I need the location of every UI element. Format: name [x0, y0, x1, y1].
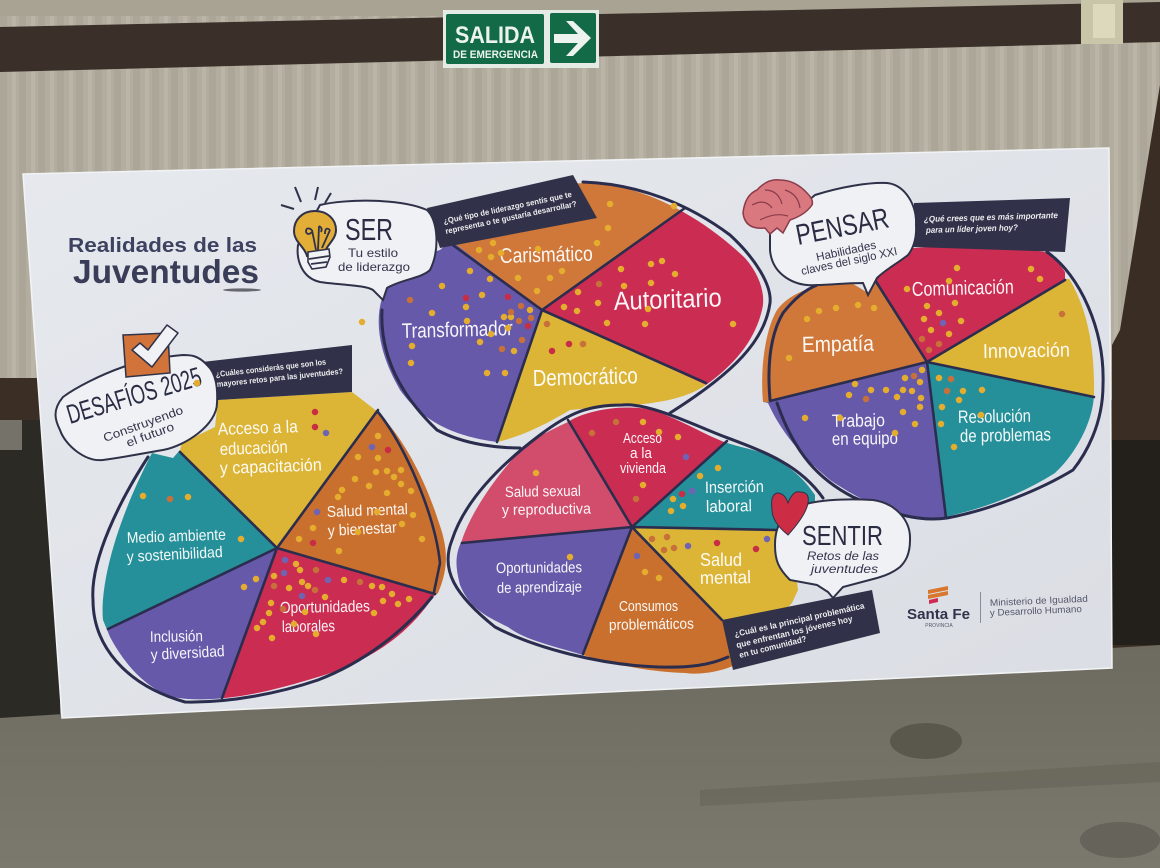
- logo: Santa Fe: PROVINCIA: [925, 623, 953, 629]
- label: Acceso a la vivienda: a la: [630, 446, 653, 462]
- slice: Democrático: [497, 310, 706, 450]
- label: Salud sexual y reproductiva: Salud sexual: [505, 483, 581, 501]
- label: Empatía: Empatía: [802, 331, 875, 357]
- heading: DESAFÍOS 2025: DESAFÍOS 2025: [63, 362, 205, 430]
- heading: PENSAR: PENSAR: [793, 203, 892, 252]
- label: Salud mental y bienestar: y bienestar: [327, 519, 397, 540]
- title: Realidades de las: [68, 234, 257, 257]
- sticker dots: DESAFÍOS: [143, 436, 422, 638]
- slice: Carismático: [456, 183, 680, 308]
- panel: SENTIR pie: [440, 395, 830, 680]
- slice: Comunicación: [876, 247, 1065, 360]
- label: Oportunidades laborales: [280, 598, 370, 636]
- SER question box: representa o te gustaría desarrollar?: [445, 199, 578, 236]
- slice: Trabajo en equipo: [764, 364, 944, 518]
- label: Salud sexual y reproductiva: y reproductiva: [502, 500, 592, 519]
- slice: Innovación: [930, 279, 1094, 396]
- label: Democrático: Democrático: [532, 362, 638, 391]
- label: Salud mental y bienestar: Salud mental: [327, 501, 408, 521]
- slice: Resolución de problemas: [928, 364, 1094, 516]
- label: Resolución de problemas: de problemas: [960, 424, 1051, 446]
- slice: Acceso a la educación: [180, 392, 376, 546]
- label: Oportunidades de aprendizaje: Oportunidades: [496, 559, 582, 577]
- label: Inserción laboral: laboral: [706, 497, 752, 516]
- panel: SER pie: [358, 180, 772, 450]
- SER question box: ¿Qué tipo de liderazgo sentís que te: [443, 190, 573, 226]
- label: Oportunidades de aprendizaje: de aprendizaje: [497, 579, 582, 597]
- wall outlet: [1081, 0, 1123, 44]
- label: Salud mental: mental: [700, 567, 751, 588]
- title: [68, 234, 261, 292]
- label: Oportunidades laborales: laborales: [282, 618, 335, 636]
- label: Autoritario: Autoritario: [613, 282, 722, 316]
- label: Consumos problemáticos: problemáticos: [609, 616, 694, 634]
- subheading: Construyendo el futuro: el futuro: [124, 419, 176, 450]
- slice: Oportunidades laborales: [223, 550, 437, 698]
- logo: Santa Fe: y Desarrollo Humano: [990, 604, 1082, 619]
- label: Acceso a la vivienda: [620, 431, 667, 477]
- label: Transformador: Transformador: [402, 317, 513, 343]
- sticker dot: [194, 380, 200, 386]
- icon: brain: [743, 180, 812, 234]
- icon: light bulb: [281, 187, 336, 269]
- label: Medio ambiente y sostenibilidad: y sostenibilidad: [126, 544, 223, 566]
- SENTIR question box: en tu comunidad?: [738, 634, 807, 660]
- slice: Autoritario: [544, 212, 764, 385]
- heading: SENTIR: SENTIR: [802, 520, 883, 551]
- subheading: Habilidades claves del siglo XXI: Habilidades: [815, 239, 878, 264]
- subheading: Tu estilo de liderazgo: Tu estilo: [348, 246, 398, 260]
- logo: Santa Fe: Santa Fe: [907, 606, 970, 623]
- SER speech bubble: [281, 187, 436, 300]
- slice: Medio ambiente: [102, 450, 275, 630]
- subheading: Tu estilo de liderazgo: de liderazgo: [338, 260, 410, 274]
- wooden beam: [0, 2, 1160, 72]
- label: Acceso a la educación y capacitación: Acceso a la: [217, 416, 298, 439]
- label: Salud mental: [700, 550, 751, 588]
- slice: Salud sexual y reproductiva: [460, 422, 630, 543]
- label: Oportunidades laborales: Oportunidades: [280, 598, 370, 617]
- emergency exit sign: DE EMERGENCIA: [453, 49, 538, 61]
- subheading: Retos de las juventudes: [807, 549, 879, 576]
- heading: SER: SER: [345, 212, 393, 247]
- SENTIR question box: ¿Cuál es la principal problemática: [733, 600, 866, 639]
- label: Resolución de problemas: [958, 406, 1051, 446]
- DESAFÍOS question box: [202, 345, 352, 400]
- label: Oportunidades de aprendizaje: [496, 559, 582, 597]
- label: Acceso a la educación y capacitación: educación: [219, 437, 288, 459]
- label: Inclusión y diversidad: y diversidad: [150, 643, 225, 664]
- label: Salud mental y bienestar: [327, 501, 408, 540]
- label: Consumos problemáticos: Consumos: [619, 598, 678, 615]
- label: Inclusión y diversidad: [150, 628, 225, 664]
- icon: heart: [772, 492, 808, 535]
- slice: Acceso a la vivienda: [570, 408, 724, 525]
- SENTIR question box: que enfrentan los jóvenes hoy: [735, 613, 854, 650]
- sticker dots: SER: [362, 204, 733, 373]
- SENTIR speech bubble: [772, 492, 910, 598]
- label: Salud mental: Salud: [700, 550, 742, 570]
- slice: Consumos problemáticos: [583, 530, 732, 674]
- PENSAR question box: [913, 198, 1070, 252]
- DESAFÍOS speech bubble: [56, 325, 217, 460]
- label: Inserción laboral: Inserción: [705, 478, 764, 497]
- label: Medio ambiente y sostenibilidad: Medio ambiente: [127, 527, 226, 547]
- label: Comunicación: Comunicación: [912, 276, 1014, 301]
- label: Medio ambiente y sostenibilidad: [126, 527, 226, 566]
- slice: Salud mental: [279, 413, 446, 594]
- label: Acceso a la educación y capacitación: y capacitación: [219, 454, 322, 478]
- label: Resolución de problemas: Resolución: [958, 406, 1031, 427]
- subheading: Construyendo el futuro: Construyendo: [101, 403, 185, 445]
- label: Trabajo en equipo: Trabajo: [832, 410, 885, 431]
- subheading: Habilidades claves del siglo XXI: claves del siglo XXI: [800, 246, 898, 278]
- label: Acceso a la vivienda: Acceso: [623, 431, 662, 447]
- DESAFÍOS question box: ¿Cuáles considerás que son los: [215, 357, 327, 379]
- label: Acceso a la educación y capacitación: [217, 416, 322, 478]
- slice: Salud mental: [635, 528, 798, 620]
- label: Inserción laboral: [705, 478, 764, 516]
- label: Salud sexual y reproductiva: [502, 483, 592, 519]
- concrete floor: [0, 645, 1160, 868]
- slice: Empatía: [762, 283, 925, 402]
- label: Innovación: Innovación: [983, 339, 1070, 363]
- panel: PENSAR pie: [762, 247, 1105, 520]
- label: Consumos problemáticos: [609, 598, 694, 634]
- slice: Oportunidades de aprendizaje: [456, 528, 630, 655]
- subheading: Retos de las juventudes: juventudes: [809, 562, 878, 576]
- PENSAR question box: ¿Qué crees que es más importante: [924, 210, 1058, 224]
- subheading: Tu estilo de liderazgo: [338, 246, 410, 274]
- emergency exit sign: SALIDA: [455, 22, 535, 49]
- SENTIR question box: [722, 590, 880, 670]
- label: Trabajo en equipo: [832, 410, 898, 449]
- logo: Santa Fe: Ministerio de Igualdad: [990, 594, 1088, 609]
- PENSAR question box: para un líder joven hoy?: [925, 222, 1019, 235]
- title: Juventudes: [73, 253, 259, 290]
- label: Carismático: Carismático: [500, 243, 593, 268]
- sticker dots: SENTIR: [536, 422, 718, 578]
- subheading: Retos de las juventudes: Retos de las: [807, 549, 879, 563]
- PENSAR speech bubble: [743, 180, 916, 295]
- slice: Inserción laboral: [635, 443, 815, 529]
- icon: checkbox: [123, 325, 178, 377]
- label: Inclusión y diversidad: Inclusión: [150, 628, 203, 646]
- SER question box: [427, 175, 597, 248]
- label: Acceso a la vivienda: vivienda: [620, 461, 667, 477]
- board: [23, 148, 1112, 718]
- slice: Transformador: [378, 244, 540, 442]
- DESAFÍOS question box: mayores retos para las juventudes?: [216, 367, 344, 389]
- label: Trabajo en equipo: en equipo: [832, 428, 898, 449]
- sticker dots: PENSAR: [789, 268, 1040, 447]
- slice: Inclusión: [107, 550, 275, 700]
- panel: DESAFÍOS pie: [90, 380, 460, 710]
- emergency exit sign: [443, 10, 599, 68]
- logo: Santa Fe: [907, 586, 1088, 629]
